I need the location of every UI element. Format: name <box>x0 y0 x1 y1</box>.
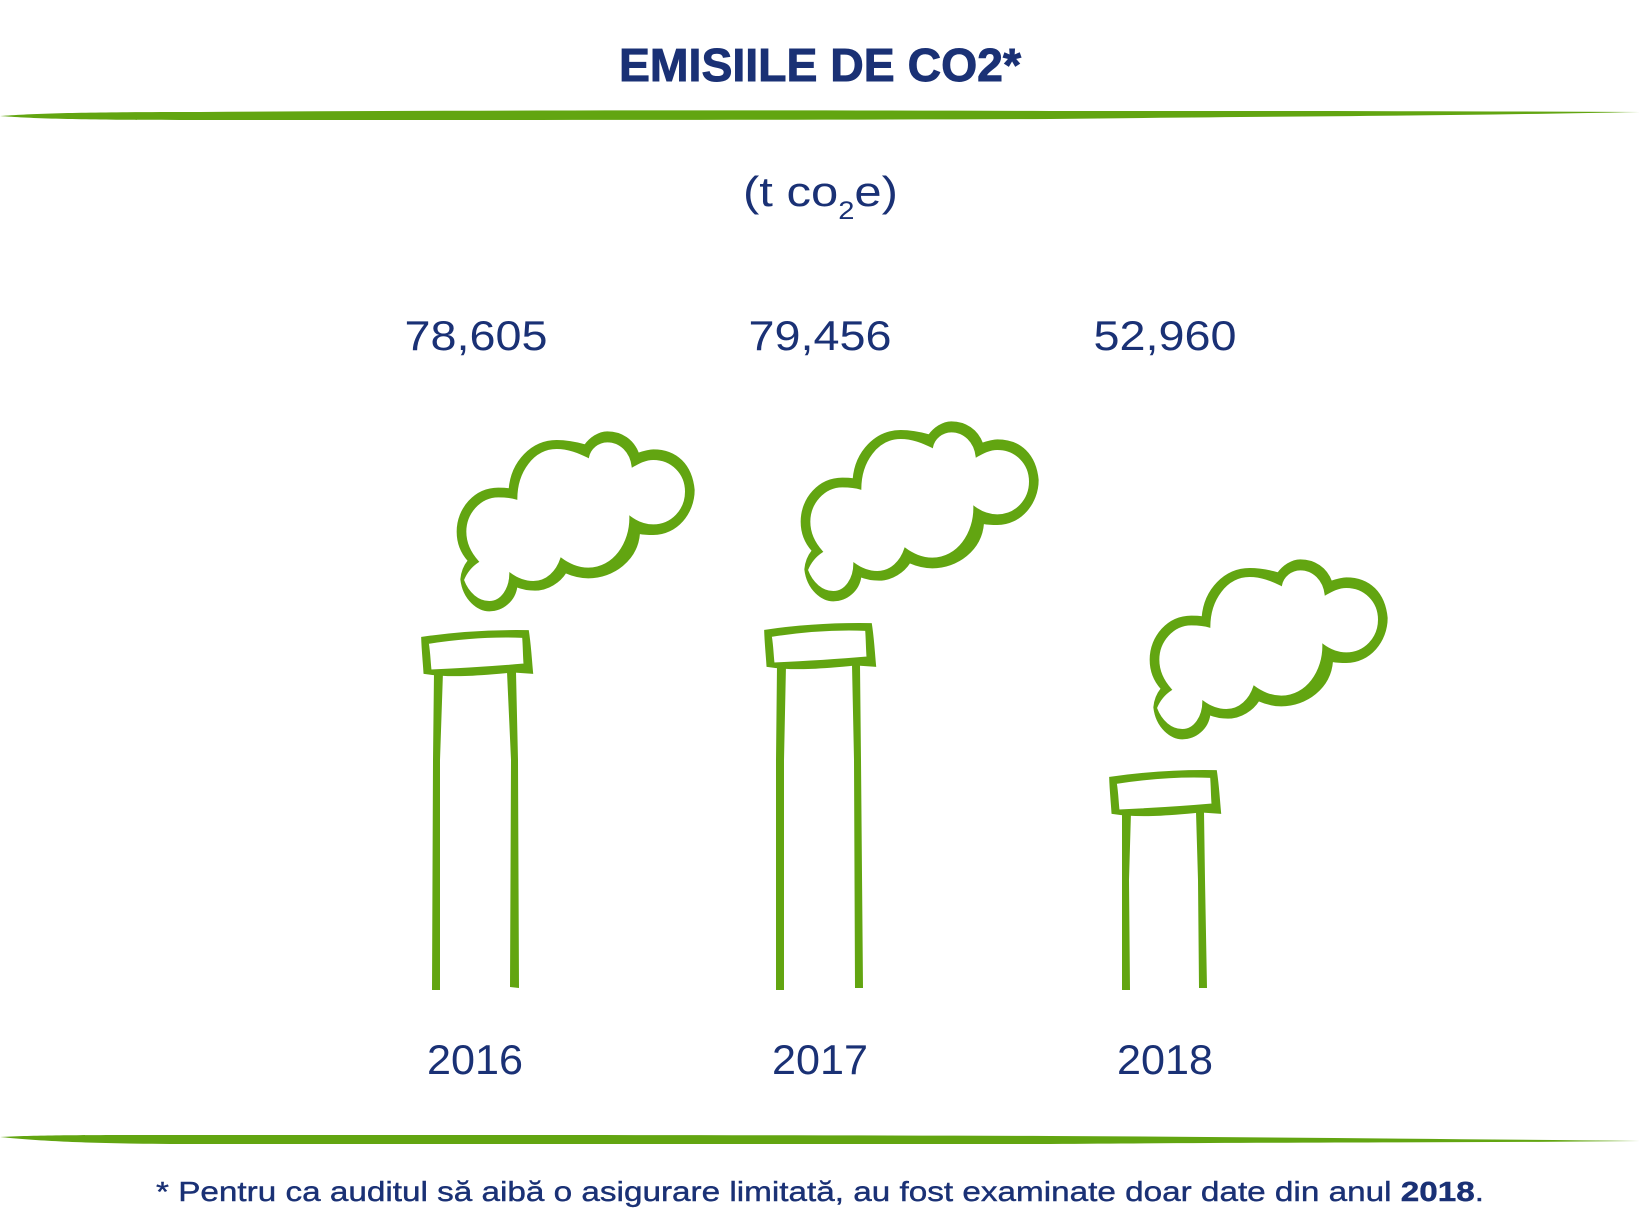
year 2017: 2017 <box>772 1036 868 1083</box>
top divider <box>0 110 1640 120</box>
value 2018: 52,960 <box>1094 312 1236 359</box>
stack 2017 <box>765 624 876 990</box>
stack 2016 <box>422 631 533 990</box>
unit label: 2 <box>838 197 854 225</box>
title: EMISIILE DE CO2* <box>619 39 1021 91</box>
cloud 2016 <box>457 432 694 611</box>
value 2016: 78,605 <box>404 312 548 359</box>
unit label: e) <box>854 168 898 215</box>
stack 2018 <box>1110 771 1221 990</box>
bottom divider <box>0 1135 1640 1144</box>
cloud 2017 <box>801 422 1038 601</box>
value 2017: 79,456 <box>748 312 892 359</box>
footnote: * Pentru ca auditul să aibă o asigurare limitată, au fost examinate doar date din anul 2018 . <box>156 1176 1484 1207</box>
chimney 2016 <box>422 432 694 990</box>
year 2016: 2016 <box>427 1036 523 1083</box>
year 2018: 2018 <box>1117 1036 1213 1083</box>
chimney 2017 <box>765 422 1038 990</box>
unit label: (t co <box>743 168 825 215</box>
cloud 2018 <box>1150 560 1387 739</box>
chimney 2018 <box>1110 560 1387 990</box>
